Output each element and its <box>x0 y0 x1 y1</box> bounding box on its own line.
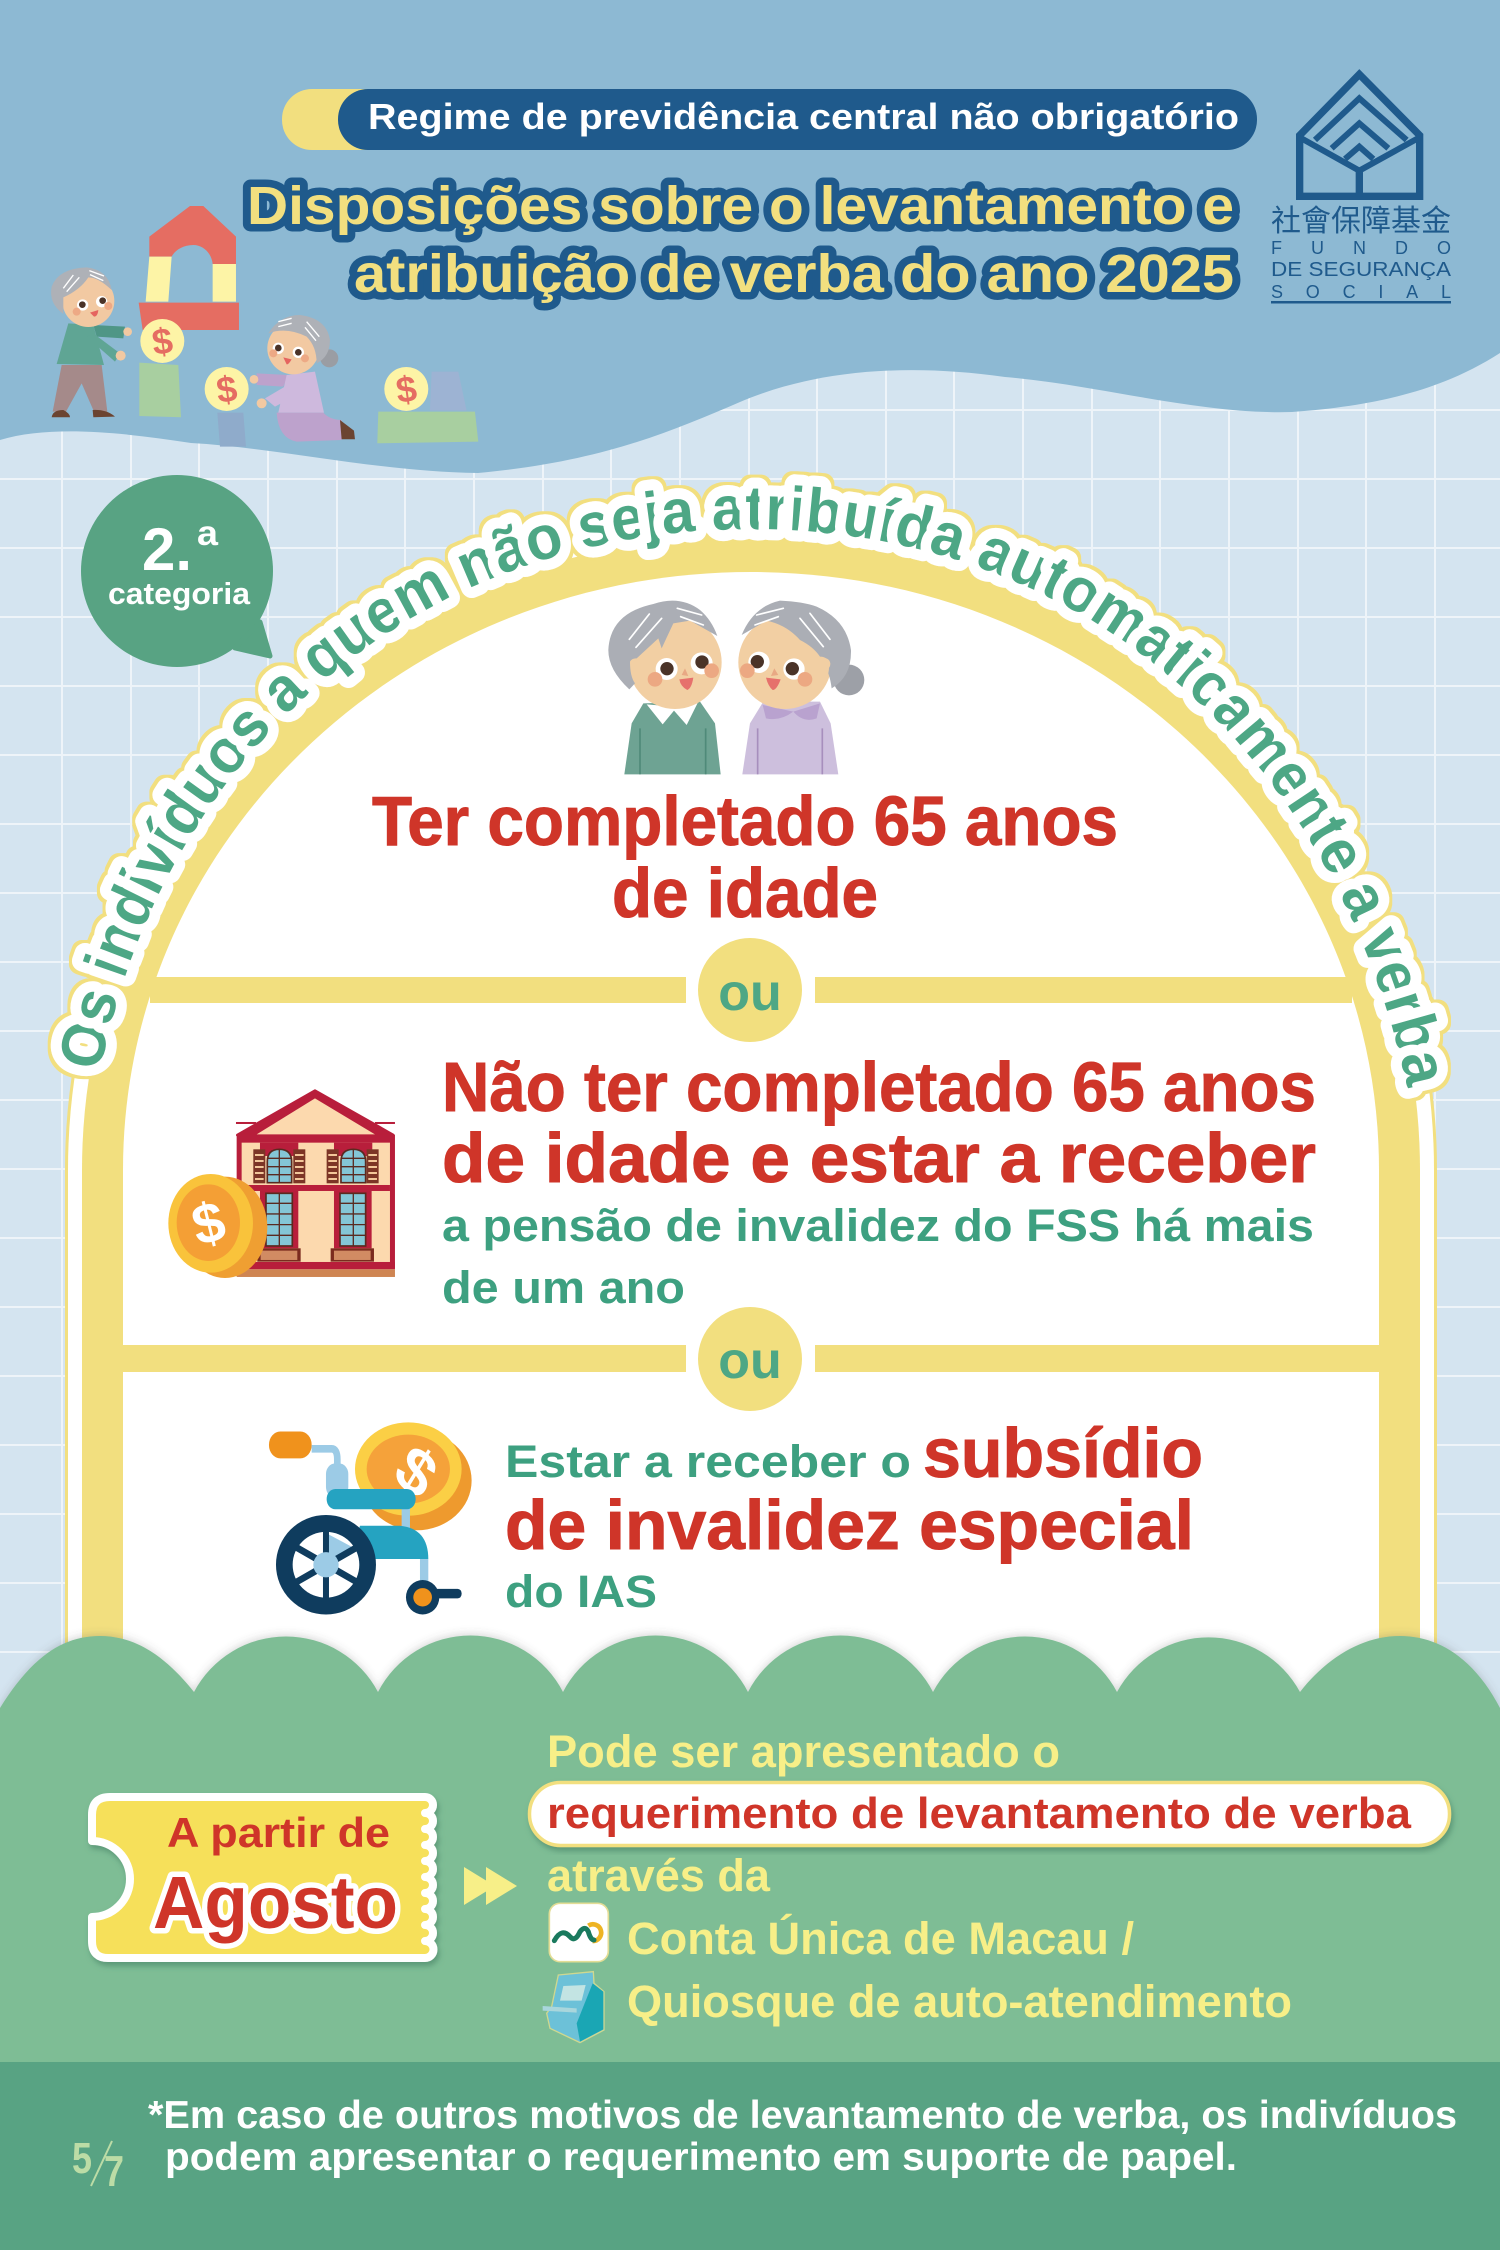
second condition text: Não ter completado 65 anos <box>442 1048 1316 1126</box>
logo: Fundo de Segurança Social: FUNDO <box>1271 238 1451 258</box>
badge: 2.a categoria: categoria <box>108 576 251 611</box>
third condition text: subsídio <box>923 1414 1203 1492</box>
logo: Fundo de Segurança Social: SOCIAL <box>1271 282 1451 302</box>
badge: 2.a categoria <box>81 475 273 667</box>
badge: 2.a categoria: a <box>197 514 219 553</box>
coins: $ <box>393 368 419 411</box>
old woman <box>250 315 355 442</box>
bottom green panel with scalloped top <box>0 1636 1500 2070</box>
header pill: Regime de previdência central não obrigatório <box>368 96 1239 137</box>
ticket: A partir de Agosto <box>92 1797 434 1958</box>
arch: outer yellow, white border, yellow band, white interior <box>65 516 1437 1720</box>
icon: wheelchair with coin: $ <box>383 1430 449 1513</box>
coins <box>140 319 428 411</box>
logo: Fundo de Segurança Social: 社會保障基金 <box>1271 205 1451 238</box>
ticket: A partir de Agosto: A partir de <box>167 1809 390 1856</box>
title: Disposições sobre o levantamento e <box>247 176 1234 236</box>
first condition text: Ter completado 65 anos <box>372 782 1118 860</box>
page number 5/7: 7 <box>104 2147 124 2196</box>
third condition text: do IAS <box>505 1566 657 1617</box>
second condition text: a pensão de invalidez do FSS há mais <box>442 1200 1314 1251</box>
man <box>608 601 722 774</box>
logo: Fundo de Segurança Social <box>1271 74 1452 303</box>
icon: building with coin <box>168 1091 395 1278</box>
coins: $ <box>214 368 240 411</box>
old man <box>51 267 132 417</box>
illustration: elderly couple with blocks and coins <box>51 206 478 447</box>
footnote: podem apresentar o requerimento em suporte de papel. <box>165 2136 1237 2179</box>
footnote: *Em caso de outros motivos de levantamento de verba, os indivíduos <box>148 2094 1457 2137</box>
connector: ou: ou <box>718 964 782 1022</box>
third condition text <box>505 1414 1203 1617</box>
curved heading along the arch: Os indivíduos a quem não seja atribuída automaticamente a verba <box>48 471 1451 1101</box>
footer band <box>0 2062 1500 2250</box>
text: pode ser apresentado: Pode ser apresentado o <box>547 1726 1060 1777</box>
woman <box>738 601 864 774</box>
third condition text: de invalidez especial <box>505 1486 1194 1564</box>
toy blocks <box>139 206 478 447</box>
second condition text: de um ano <box>442 1262 685 1313</box>
text: através da: através da <box>547 1850 771 1901</box>
coin <box>168 1174 267 1278</box>
connector: ou <box>698 1307 802 1411</box>
ticket: A partir de Agosto: Agosto <box>153 1861 398 1944</box>
connector: ou <box>698 938 802 1042</box>
arrow: double chevron <box>464 1867 517 1905</box>
connector: ou: ou <box>718 1332 782 1390</box>
illustration: elderly couple <box>608 601 864 774</box>
page number 5/7 <box>72 2134 124 2196</box>
page number 5/7: 5 <box>72 2134 92 2183</box>
icon: Conta Única de Macau <box>549 1903 608 1962</box>
first condition text: de idade <box>612 854 878 932</box>
header pill <box>282 89 1257 150</box>
pill: requerimento de levantamento de verba: requerimento de levantamento de verba <box>547 1789 1412 1838</box>
second condition text: de idade e estar a receber <box>442 1119 1316 1197</box>
title <box>247 176 1234 304</box>
footnote <box>148 2094 1457 2179</box>
icon: wheelchair with coin <box>269 1422 472 1614</box>
icon: self-service kiosk <box>543 1972 604 2043</box>
coin: $ <box>186 1190 232 1258</box>
second condition text <box>442 1048 1316 1313</box>
first condition text <box>372 782 1118 932</box>
third condition text: Estar a receber o <box>505 1436 911 1487</box>
badge: 2.a categoria: 2. <box>142 516 192 583</box>
coins: $ <box>149 320 175 363</box>
top wave header background <box>0 0 1500 473</box>
title: atribuição de verba do ano 2025 <box>354 244 1234 304</box>
text: Quiosque de auto-atendimento: Quiosque de auto-atendimento <box>627 1976 1292 2027</box>
text: Conta Única de Macau: Conta Única de Macau / <box>627 1913 1134 1964</box>
logo: Fundo de Segurança Social: DE SEGURANÇA <box>1271 259 1452 281</box>
